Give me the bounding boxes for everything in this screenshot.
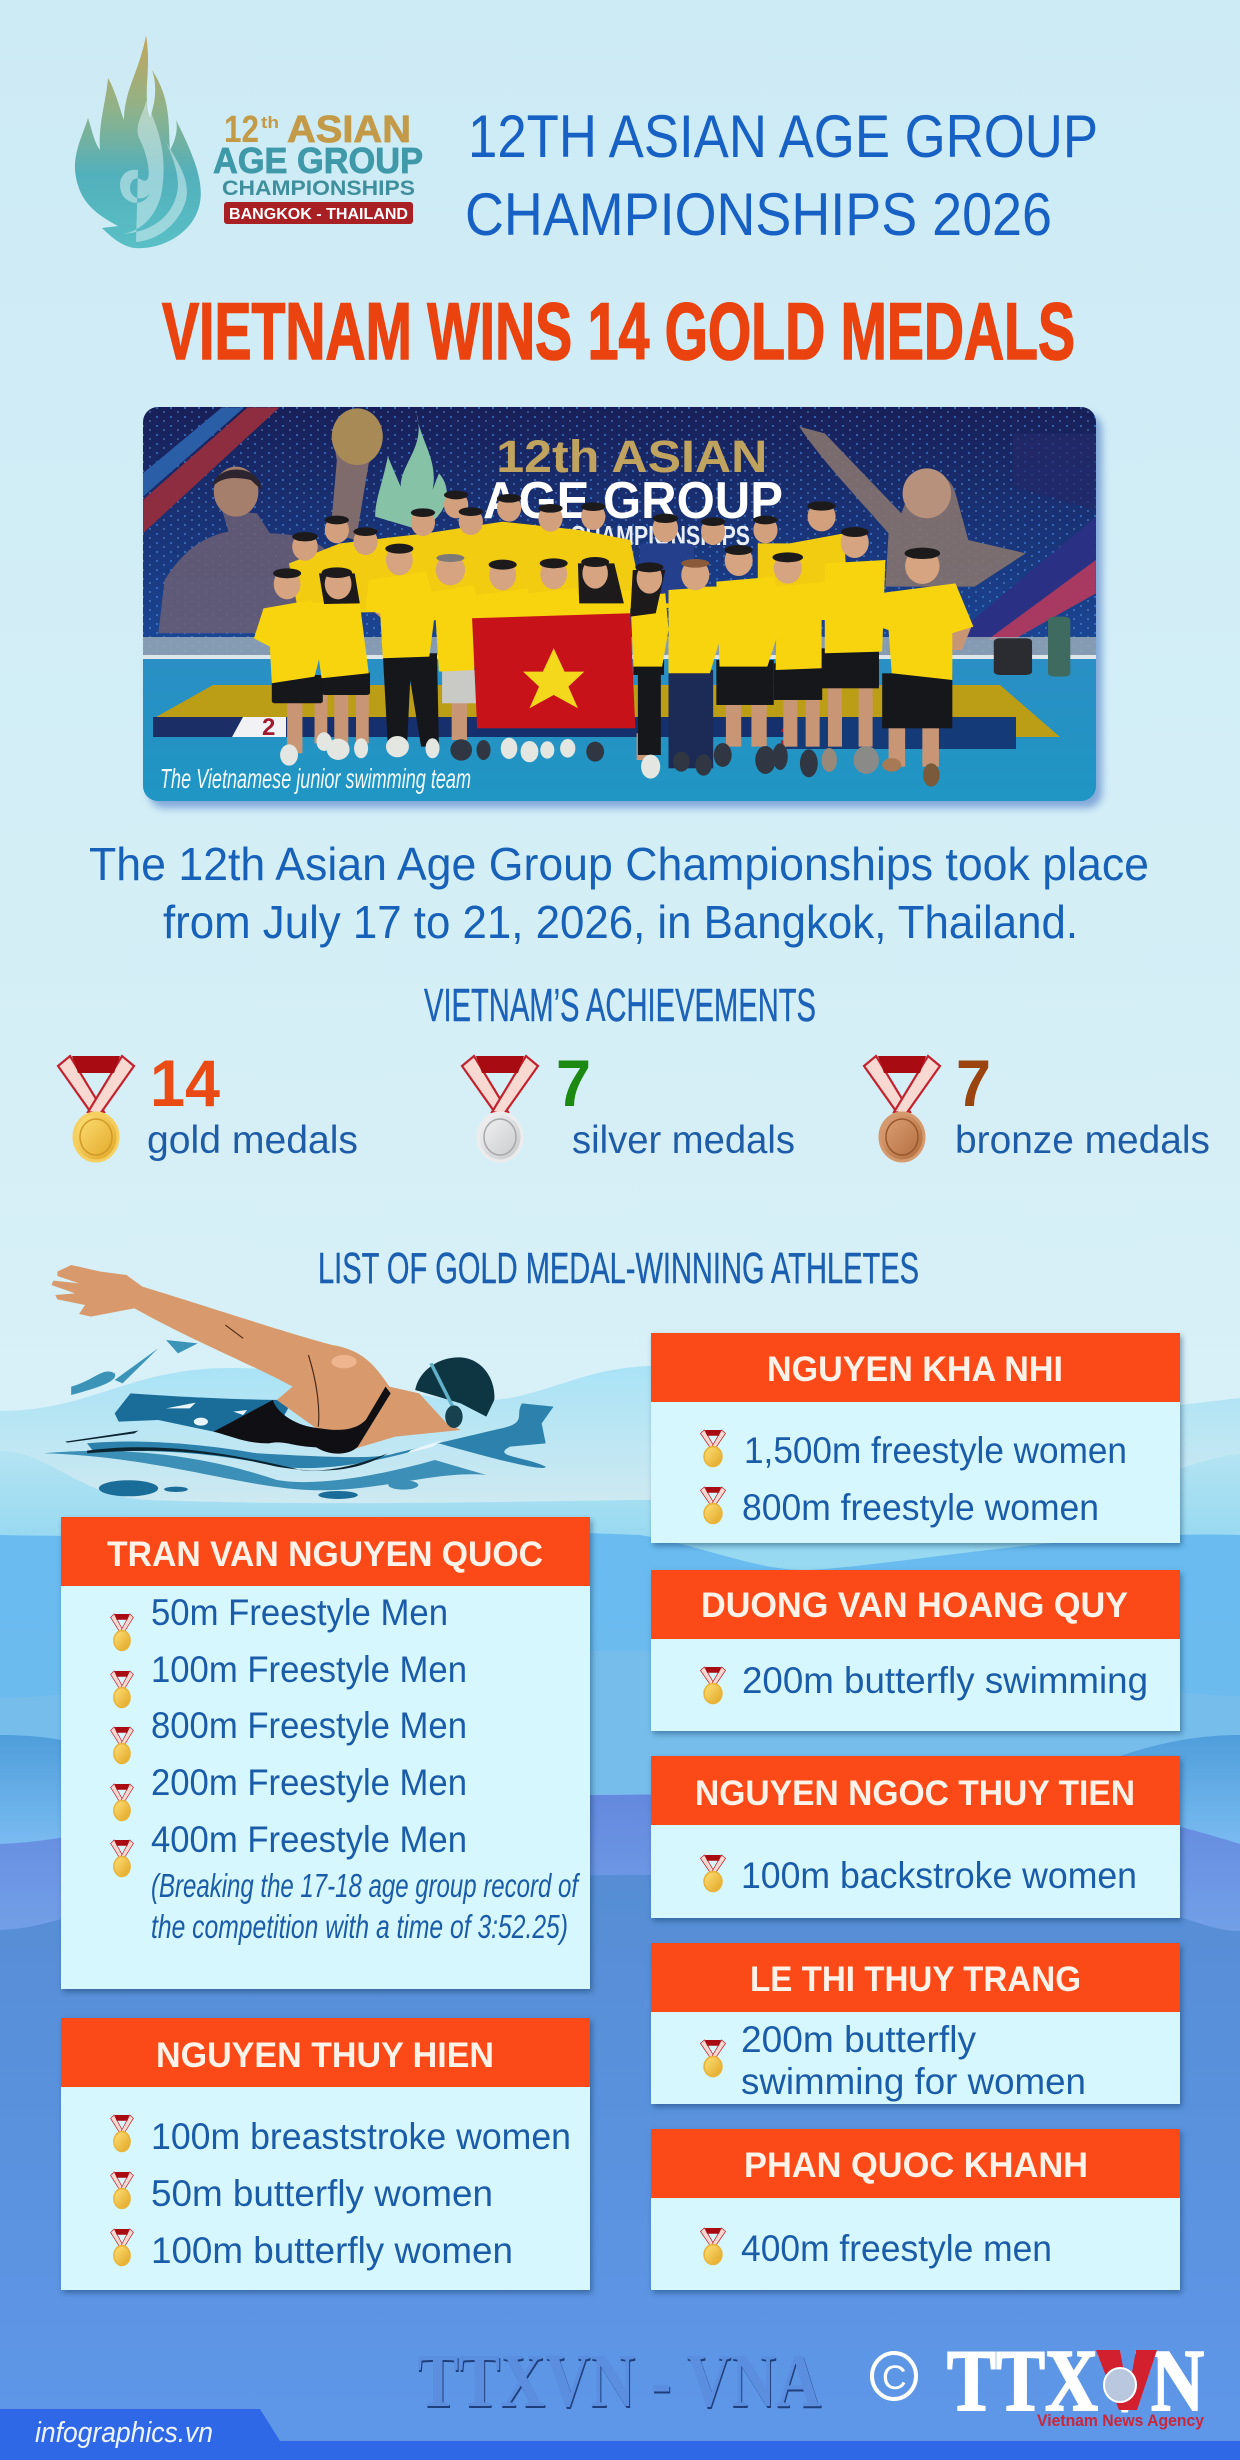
medal icons [111, 2115, 133, 2265]
shoes [280, 732, 660, 779]
card: Nguyen Kha Nhi: 1,500m freestyle women [744, 1430, 1127, 1471]
intro text [89, 838, 1149, 948]
agency logo: Vietnam News Agency [1037, 2411, 1204, 2430]
medal icon [700, 2228, 726, 2264]
card: Duong Van Hoang Quy: 200m butterfly swimming [742, 1660, 1148, 1701]
icon: silver medal [462, 1056, 538, 1161]
team photo [143, 407, 1102, 808]
card: Le Thi Thuy Trang: swimming for women [741, 2061, 1086, 2102]
card: Le Thi Thuy Trang: LE THI THUY TRANG [750, 1960, 1081, 1999]
card: Tran Van Nguyen Quoc: 200m Freestyle Men [151, 1762, 467, 1803]
podium left [153, 685, 1060, 737]
logo text: ASIAN [287, 109, 411, 151]
silver medal stat [462, 1046, 795, 1162]
card: Duong Van Hoang Quy [651, 1570, 1180, 1731]
front row shirts [254, 560, 973, 683]
silver medal stat: 7 [556, 1046, 591, 1120]
card: Nguyen Thuy Hien: 100m butterfly women [151, 2230, 513, 2271]
title: 12TH ASIAN AGE GROUP [468, 103, 1098, 170]
icon: gold medal [58, 1056, 134, 1161]
gold medal stat: 14 [150, 1046, 220, 1120]
photo caption: The Vietnamese junior swimming team [160, 763, 471, 794]
gold medal stat: gold medals [147, 1119, 358, 1162]
medal icons [111, 1614, 133, 1876]
gold medal stat [58, 1046, 358, 1162]
card: Nguyen Ngoc Thuy Tien [651, 1756, 1180, 1918]
team photo: 3 [780, 721, 796, 752]
bronze medal stat [864, 1046, 1210, 1162]
logo text: AGE GROUP [213, 140, 423, 181]
team photo: CHAMPIONSHIPS [570, 520, 750, 551]
card: Nguyen Kha Nhi [651, 1333, 1180, 1543]
intro text: The 12th Asian Age Group Championships took place [89, 838, 1149, 890]
card: Tran Van Nguyen Quoc: 400m Freestyle Men [151, 1819, 467, 1860]
front row arms [317, 612, 972, 667]
copyright symbol [872, 2353, 916, 2399]
card: Nguyen Ngoc Thuy Tien: NGUYEN NGOC THUY TIEN [695, 1774, 1135, 1813]
card: Tran Van Nguyen Quoc: 50m Freestyle Men [151, 1592, 448, 1633]
footer bar: infographics.vn [35, 2417, 213, 2449]
card: Phan Quoc Khanh: 400m freestyle men [741, 2228, 1052, 2269]
front row legs and shorts [287, 683, 939, 767]
medal icon [700, 1667, 726, 1703]
logo text: CHAMPIONSHIPS [222, 177, 415, 200]
title [465, 103, 1098, 248]
team photo: AGE GROUP [483, 472, 783, 530]
medal icon [700, 1855, 726, 1891]
icon: flame logo [75, 35, 201, 248]
card: Nguyen Ngoc Thuy Tien: 100m backstroke women [741, 1855, 1137, 1896]
card: Tran Van Nguyen Quoc: 100m Freestyle Men [151, 1649, 467, 1690]
icon: bronze medal [864, 1056, 940, 1161]
card: Nguyen Kha Nhi: 800m freestyle women [742, 1487, 1099, 1528]
card: Nguyen Thuy Hien: 100m breaststroke women [151, 2116, 571, 2157]
medal icon [700, 2040, 726, 2076]
left swimmer [158, 510, 337, 633]
copyright symbol: C [882, 2359, 907, 2397]
watermark: TTXVN - VNA: TTXVN - VNA [418, 2341, 822, 2425]
card: Tran Van Nguyen Quoc: 800m Freestyle Men [151, 1705, 467, 1746]
logo text: th [261, 113, 279, 132]
logo text: 12 [224, 109, 259, 151]
card: Le Thi Thuy Trang: 200m butterfly [741, 2019, 976, 2060]
back row shirts [289, 522, 847, 613]
card: Le Thi Thuy Trang [651, 1943, 1180, 2104]
logo text [213, 109, 423, 224]
truss and floor [143, 637, 1096, 657]
bronze medal stat: bronze medals [955, 1119, 1210, 1162]
heading: achievements: VIETNAM’S ACHIEVEMENTS [424, 979, 816, 1031]
logo text: BANGKOK - THAILAND [229, 206, 408, 223]
card: Tran Van Nguyen Quoc [61, 1517, 590, 1989]
card: Nguyen Thuy Hien [61, 2018, 590, 2290]
right swimmer [799, 427, 1026, 587]
card: Phan Quoc Khanh: PHAN QUOC KHANH [744, 2146, 1088, 2185]
banner stripes [143, 407, 279, 533]
card: Tran Van Nguyen Quoc: TRAN VAN NGUYEN QUOC [107, 1535, 543, 1574]
logo flame on banner [375, 413, 447, 530]
card: Nguyen Kha Nhi: NGUYEN KHA NHI [767, 1350, 1063, 1389]
card: Nguyen Thuy Hien: NGUYEN THUY HIEN [156, 2036, 494, 2075]
intro text: from July 17 to 21, 2026, in Bangkok, Thailand. [163, 896, 1078, 948]
card: Nguyen Thuy Hien: 50m butterfly women [151, 2173, 493, 2214]
watermark: TTXVN - VNA: TTXVN - VNA [417, 2339, 821, 2423]
long hair [319, 563, 665, 617]
illustration: swimmer [43, 1265, 554, 1499]
flag [472, 613, 635, 728]
bags [1048, 617, 1070, 677]
card: Tran Van Nguyen Quoc: the competition with a time of 3:52.25) [151, 1908, 568, 1945]
background waves [0, 1366, 1240, 2460]
bronze medal stat: 7 [956, 1046, 991, 1120]
silver medal stat: silver medals [572, 1119, 795, 1162]
heading: athlete list: LIST OF GOLD MEDAL-WINNING ATHLETES [318, 1244, 919, 1293]
team photo: 2 [262, 714, 275, 741]
card: Duong Van Hoang Quy: DUONG VAN HOANG QUY [701, 1586, 1128, 1625]
card: Phan Quoc Khanh [651, 2129, 1180, 2290]
footer bar [0, 2409, 1240, 2460]
medal icons [700, 1430, 726, 1523]
event logo [75, 35, 423, 248]
card: Tran Van Nguyen Quoc: (Breaking the 17-18 age group record of [151, 1867, 581, 1904]
title: CHAMPIONSHIPS 2026 [465, 181, 1052, 248]
